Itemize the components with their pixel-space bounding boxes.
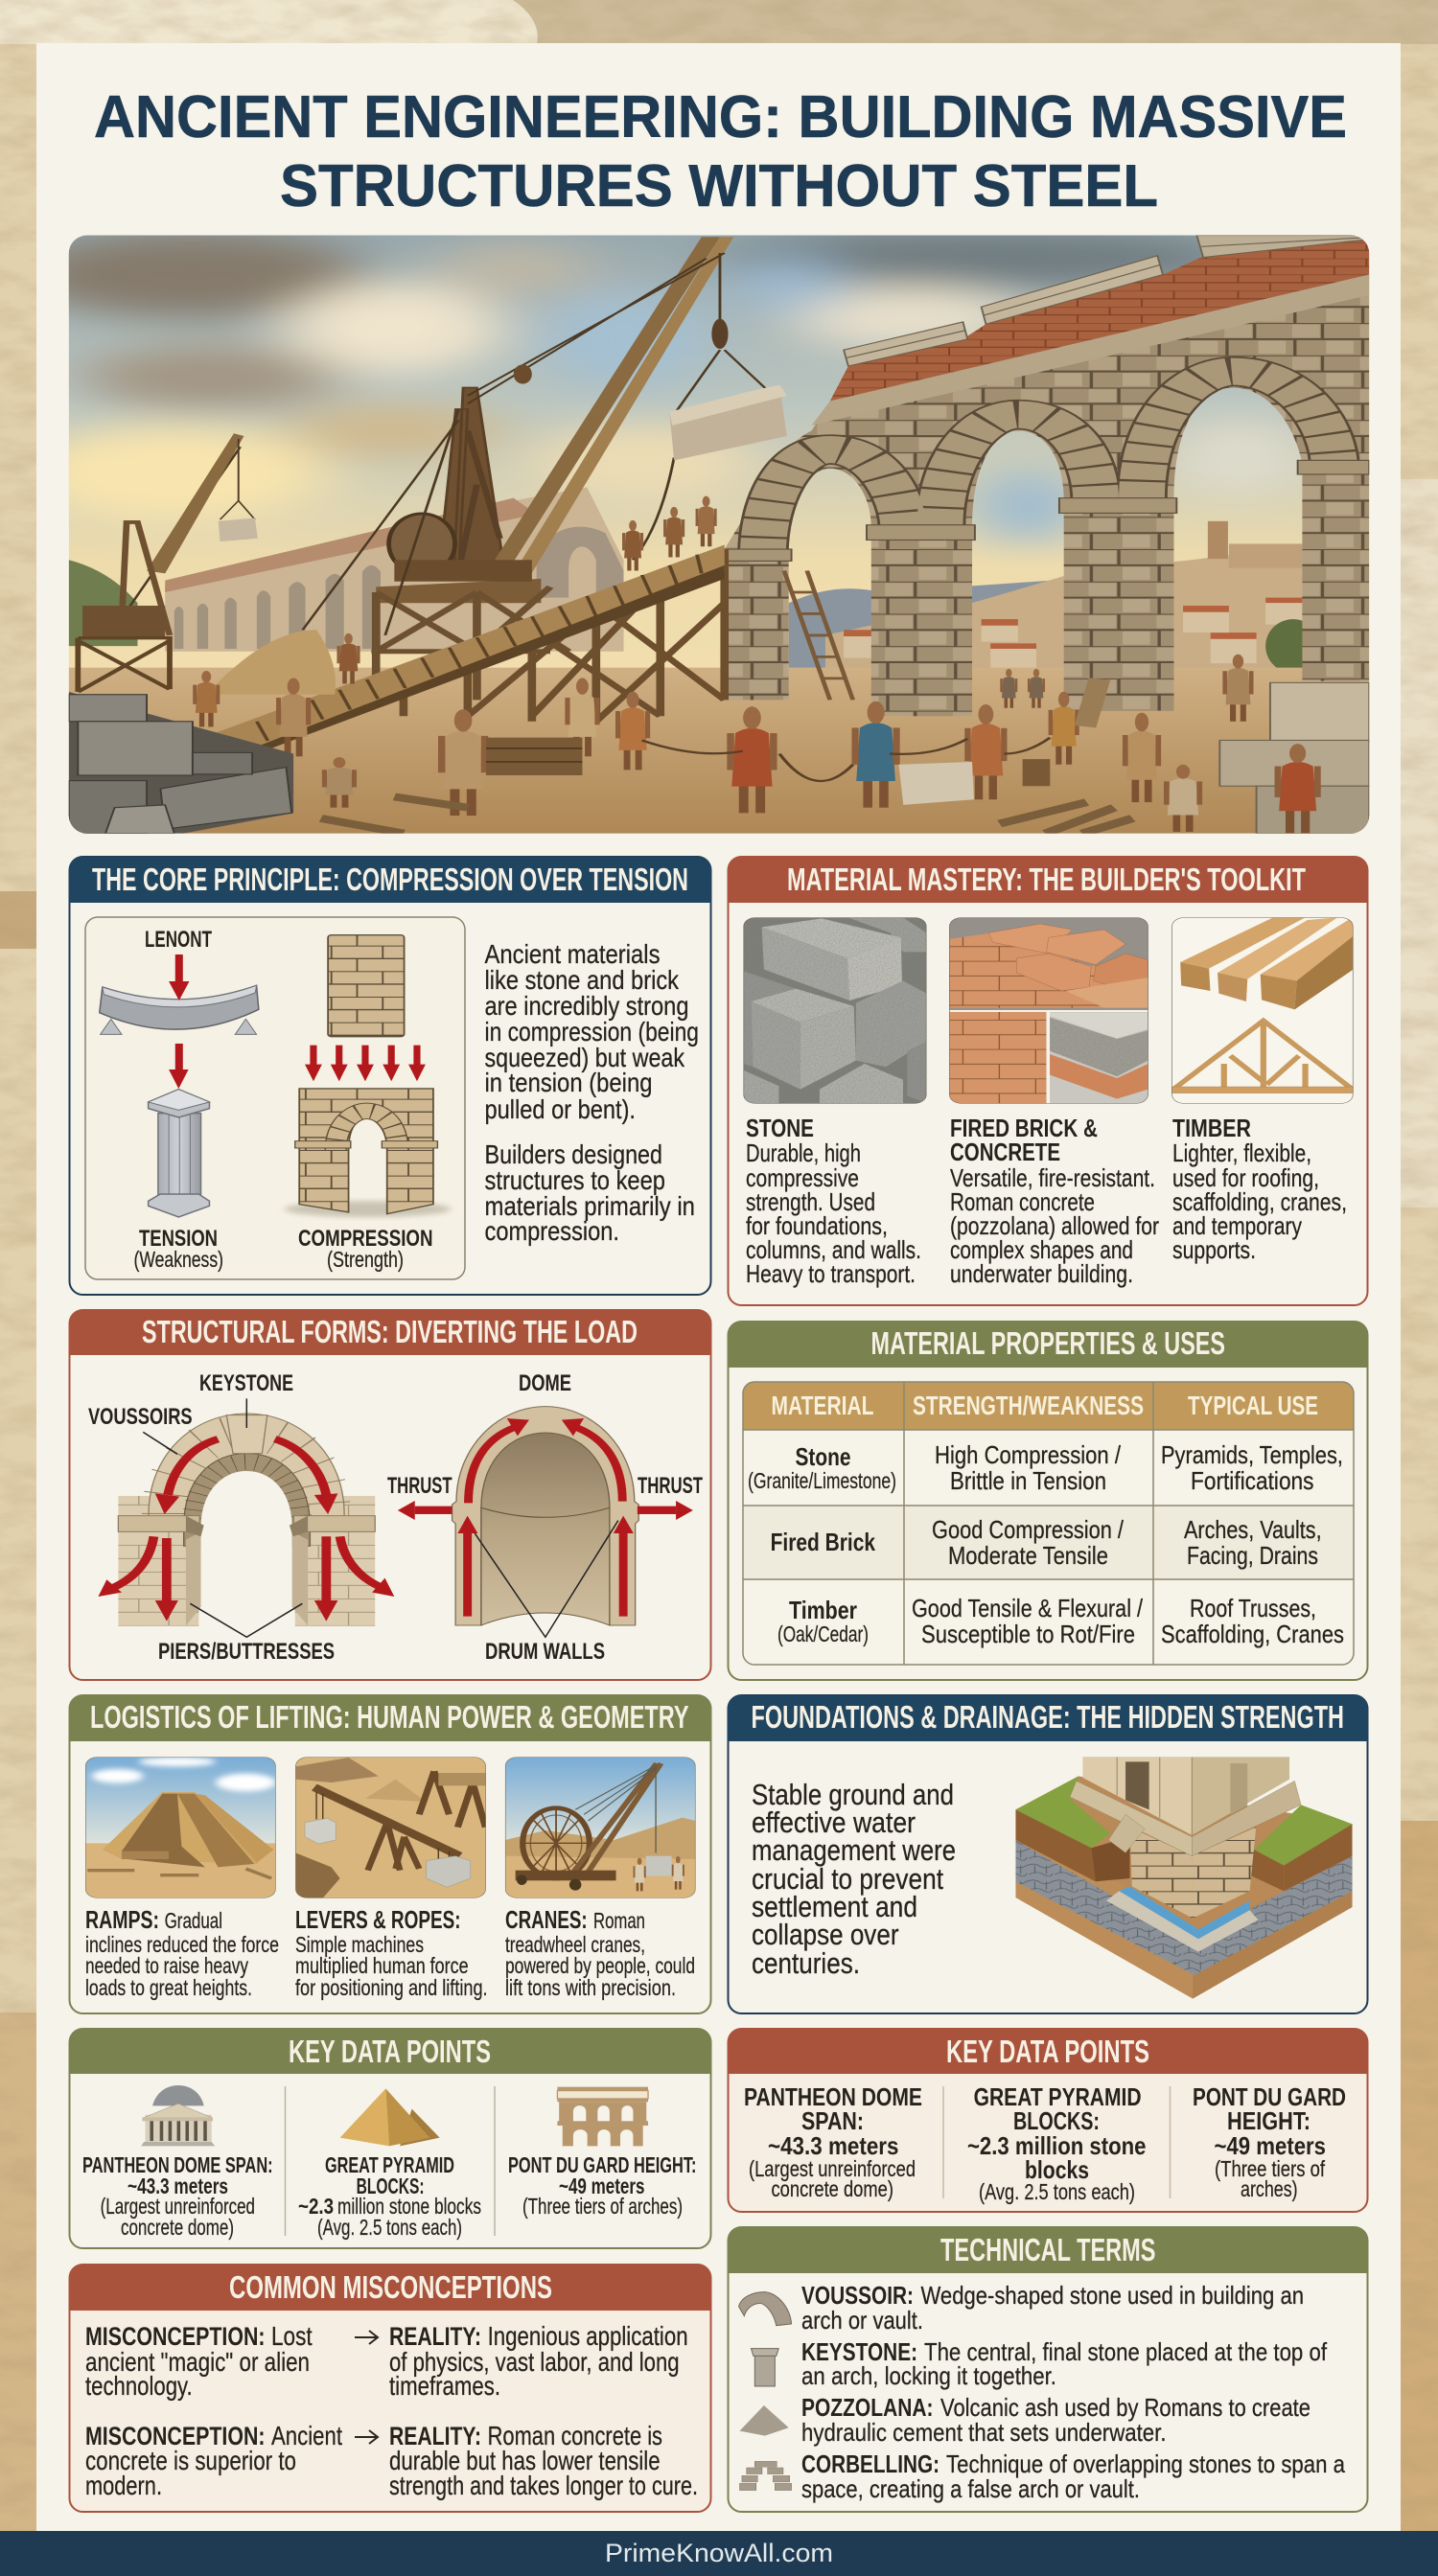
misconception two: Ancient <box>271 2421 342 2450</box>
stat: great pyramid blocks: ~2.3 <box>298 2194 334 2219</box>
labels: structural forms: DOME <box>519 1370 571 1396</box>
stat: pont du gard height: PONT DU GARD <box>1193 2082 1346 2111</box>
icon: pont du gard <box>557 2087 648 2146</box>
term: keystone: an arch, locking it together. <box>801 2361 1056 2390</box>
image: ramps <box>85 1757 276 1898</box>
misconception two: modern. <box>85 2471 162 2500</box>
icon: pantheon <box>141 2085 215 2146</box>
leader lines: arch <box>143 1398 302 1637</box>
text block: core principle explanation: Builders designed <box>485 1139 662 1169</box>
stat: great pyramid blocks: GREAT PYRAMID <box>974 2082 1142 2111</box>
misconception two <box>85 2421 342 2500</box>
icon: brick tower <box>328 935 405 1037</box>
table row: fired brick: Good Compression / <box>932 1515 1125 1544</box>
term: keystone: The central, final stone placed at the top of <box>924 2337 1328 2366</box>
text block: core principle explanation: like stone and brick <box>485 965 680 995</box>
misconception two: concrete is superior to <box>85 2446 296 2475</box>
stat: pont du gard height: arches) <box>1241 2176 1298 2201</box>
arrow: load on column <box>169 1044 189 1089</box>
text: levers and ropes: Simple machines <box>295 1932 424 1957</box>
reality two: strength and takes longer to cure. <box>389 2471 698 2500</box>
diagram: arch <box>98 1414 394 1626</box>
text: cranes: Roman <box>593 1908 645 1933</box>
image: levers and ropes <box>295 1757 486 1898</box>
ground <box>69 668 1369 835</box>
sand heap <box>206 630 336 695</box>
table row: timber <box>777 1594 1344 1648</box>
column: timber: TIMBER <box>1172 1114 1251 1142</box>
column: stone <box>746 1114 921 1288</box>
column: timber: and temporary <box>1172 1211 1302 1240</box>
illustration: foundation cross-section <box>1015 1757 1353 1999</box>
footer bar: PrimeKnowAll.com <box>605 2539 833 2567</box>
panel: key data points with icons <box>69 2029 711 2248</box>
table row: stone: Stone <box>796 1442 851 1471</box>
table row: timber: Roof Trusses, <box>1190 1594 1316 1622</box>
hero illustration: Roman aqueduct construction <box>18 229 1369 835</box>
term: keystone <box>801 2337 1328 2390</box>
reality one <box>389 2321 688 2401</box>
term: corbelling <box>801 2450 1345 2503</box>
text: levers and ropes <box>295 1905 488 2000</box>
ramp <box>200 545 725 754</box>
red load arrows: arch <box>98 1439 394 1622</box>
loose block, crate, timber <box>321 678 1132 834</box>
reality one: REALITY: <box>389 2322 481 2351</box>
text: ramps <box>85 1905 279 2000</box>
text: foundations explanation: crucial to prevent <box>752 1862 943 1896</box>
misconception one: MISCONCEPTION: <box>85 2322 265 2351</box>
column: timber <box>1172 1114 1347 1264</box>
labels: structural forms: KEYSTONE <box>199 1370 293 1396</box>
column: fired brick and concrete: complex shapes and <box>950 1235 1133 1264</box>
column: fired brick and concrete: underwater building. <box>950 1259 1133 1288</box>
image: stone blocks <box>743 917 927 1104</box>
leader lines: dome <box>475 1521 618 1637</box>
image: brick and concrete <box>949 917 1148 1104</box>
stat: pont du gard height: (Three tiers of <box>1215 2156 1325 2181</box>
ladder <box>784 571 853 700</box>
icon: pozzolana pile <box>740 2405 789 2436</box>
stat: pantheon dome span <box>744 2082 922 2201</box>
stat: pantheon dome span: SPAN: <box>801 2106 864 2135</box>
text block: core principle explanation <box>485 939 699 1246</box>
image: timber beams and truss <box>1171 917 1354 1104</box>
text block: core principle explanation: structures to keep <box>485 1165 665 1195</box>
label: lenont: LENONT <box>145 927 212 953</box>
stat: pantheon dome span: PANTHEON DOME SPAN: <box>82 2152 273 2177</box>
icon: column <box>149 1090 209 1217</box>
captions: tension and compression: COMPRESSION <box>298 1226 433 1252</box>
term: voussoir: Wedge-shaped stone used in building an <box>920 2281 1304 2310</box>
column: fired brick and concrete: Roman concrete <box>950 1187 1095 1216</box>
text block: core principle explanation: in tension (being <box>485 1068 652 1097</box>
table row: fired brick <box>771 1515 1322 1570</box>
column: stone: strength. Used <box>746 1187 875 1216</box>
workers <box>193 496 1254 832</box>
text: foundations explanation: collapse over <box>752 1918 899 1951</box>
table row: fired brick: Fired Brick <box>771 1528 875 1556</box>
header: logistics: LOGISTICS OF LIFTING: HUMAN POWER & GEOMETRY <box>90 1699 688 1735</box>
text block: core principle explanation: squeezed) but weak <box>485 1043 685 1072</box>
header: the core principle <box>69 857 711 903</box>
title: ANCIENT ENGINEERING: BUILDING MASSIVE <box>94 84 1347 150</box>
table: materials <box>743 1382 1354 1665</box>
header: material properties <box>728 1322 1368 1368</box>
text: ramps: loads to great heights. <box>85 1975 252 2000</box>
reality two: durable but has lower tensile <box>389 2446 661 2475</box>
labels: structural forms: THRUST <box>387 1473 452 1499</box>
foreground stones <box>69 692 293 834</box>
misconception one: ancient "magic" or alien <box>85 2347 310 2377</box>
table row: stone: Fortifications <box>1191 1466 1313 1495</box>
title <box>94 84 1347 219</box>
text block: core principle explanation: Ancient materials <box>485 939 660 969</box>
tower <box>1082 1757 1192 1835</box>
text: foundations explanation: settlement and <box>752 1890 917 1923</box>
image: treadwheel crane <box>505 1757 696 1898</box>
panel: common misconceptions <box>69 2265 711 2512</box>
stat: pantheon dome span: PANTHEON DOME <box>744 2082 922 2111</box>
town <box>825 521 1302 668</box>
arrow: misconception to reality <box>355 2331 378 2344</box>
stat: great pyramid blocks: (Avg. 2.5 tons each) <box>979 2179 1135 2204</box>
stat: great pyramid blocks: blocks <box>1025 2155 1089 2184</box>
table header row: STRENGTH/WEAKNESS <box>913 1391 1144 1420</box>
stat: great pyramid blocks: (Avg. 2.5 tons each) <box>317 2215 462 2240</box>
icon: stone arch <box>285 1089 452 1217</box>
stat: great pyramid blocks: ~2.3 million stone <box>967 2131 1147 2160</box>
text: ramps: needed to raise heavy <box>85 1953 248 1978</box>
stat: pantheon dome span: (Largest unreinforced <box>749 2156 916 2181</box>
stat: pantheon dome span: (Largest unreinforced <box>101 2194 255 2219</box>
text block: core principle explanation: are incredibly strong <box>485 991 688 1021</box>
header: technical terms <box>728 2227 1368 2273</box>
diagram: dome <box>398 1407 693 1625</box>
labels: structural forms: DRUM WALLS <box>485 1639 605 1665</box>
term: pozzolana: POZZOLANA: <box>801 2393 934 2422</box>
header: misconceptions <box>69 2265 711 2311</box>
panel: foundations and drainage <box>728 1695 1368 2013</box>
table row: stone: (Granite/Limestone) <box>748 1468 896 1493</box>
stepped foundation <box>1130 1828 1193 1919</box>
text: foundations explanation: Stable ground and <box>752 1778 954 1811</box>
table row: timber: Good Tensile & Flexural / <box>912 1594 1144 1622</box>
term: pozzolana: hydraulic cement that sets underwater. <box>801 2418 1166 2447</box>
table row: timber: (Oak/Cedar) <box>777 1622 869 1646</box>
text: foundations explanation: centuries. <box>752 1946 860 1980</box>
text: cranes <box>505 1905 695 2000</box>
column: stone: STONE <box>746 1114 814 1142</box>
column: stone: Heavy to transport. <box>746 1259 916 1288</box>
term: corbelling: space, creating a false arch or vault. <box>801 2474 1140 2503</box>
icon: keystone column <box>751 2349 778 2386</box>
misconception two: MISCONCEPTION: <box>85 2422 265 2450</box>
stat: pont du gard height: ~49 meters <box>559 2174 644 2198</box>
table row: fired brick: Facing, Drains <box>1187 1541 1318 1570</box>
reality one: Ingenious application <box>488 2321 688 2351</box>
stat: pantheon dome span: concrete dome) <box>121 2215 234 2240</box>
stat: pont du gard height <box>508 2152 696 2219</box>
text: ramps: inclines reduced the force <box>85 1932 279 1957</box>
stat: pantheon dome span <box>82 2152 273 2240</box>
column: fired brick and concrete: Versatile, fire-resistant. <box>950 1163 1155 1192</box>
header: material properties: MATERIAL PROPERTIES & USES <box>870 1325 1225 1361</box>
stat: great pyramid blocks <box>298 2152 481 2240</box>
text block: core principle explanation: materials primarily in <box>485 1191 695 1221</box>
term: pozzolana <box>801 2393 1310 2447</box>
stat: pantheon dome span: ~43.3 meters <box>768 2131 899 2160</box>
title: STRUCTURES WITHOUT STEEL <box>280 153 1158 219</box>
reality one: timeframes. <box>389 2371 500 2401</box>
text: ramps: Gradual <box>165 1908 222 1933</box>
panel: structural forms <box>69 1310 711 1680</box>
term: voussoir: arch or vault. <box>801 2306 923 2334</box>
term: pozzolana: Volcanic ash used by Romans to create <box>940 2393 1310 2422</box>
column: stone: columns, and walls. <box>746 1235 921 1264</box>
stone trench and water channel <box>1119 1886 1250 1939</box>
header: the core principle: THE CORE PRINCIPLE: COMPRESSION OVER TENSION <box>92 862 688 897</box>
column: stone: compressive <box>746 1163 859 1192</box>
text: cranes: powered by people, could <box>505 1953 695 1978</box>
term: corbelling: Technique of overlapping stones to span a <box>946 2450 1345 2478</box>
text: levers and ropes: for positioning and lifting. <box>295 1975 488 2000</box>
column: stone: for foundations, <box>746 1211 888 1240</box>
captions: tension and compression: (Strength) <box>327 1247 404 1272</box>
icon: pyramid <box>340 2088 440 2146</box>
stat: great pyramid blocks: BLOCKS: <box>357 2174 425 2198</box>
stat: pont du gard height <box>1193 2082 1346 2201</box>
captions: tension and compression <box>134 1226 433 1272</box>
text block: core principle explanation: compression. <box>485 1216 619 1246</box>
arrow: misconception to reality <box>355 2430 378 2444</box>
table row: stone: Brittle in Tension <box>950 1466 1106 1495</box>
stat: pont du gard height: ~49 meters <box>1214 2131 1326 2160</box>
reality two: Roman concrete is <box>488 2421 662 2450</box>
text: levers and ropes: multiplied human force <box>295 1953 469 1978</box>
header: logistics <box>69 1695 711 1741</box>
header: key data points <box>728 2029 1368 2074</box>
text: foundations explanation: effective water <box>752 1806 916 1839</box>
table row: timber: Scaffolding, Cranes <box>1161 1620 1344 1648</box>
column: timber: used for roofing, <box>1172 1163 1319 1192</box>
small crane <box>78 433 258 692</box>
term: corbelling: CORBELLING: <box>801 2450 939 2478</box>
table row: timber: Timber <box>789 1596 857 1624</box>
panel: technical terms <box>728 2227 1368 2512</box>
icon: voussoir <box>739 2292 792 2326</box>
reality two <box>389 2421 698 2500</box>
table row: stone <box>748 1440 1343 1495</box>
header: key data points: KEY DATA POINTS <box>946 2034 1149 2069</box>
reality two: REALITY: <box>389 2422 481 2450</box>
stat: great pyramid blocks: million stone blocks <box>337 2194 481 2219</box>
column: timber: supports. <box>1172 1235 1256 1264</box>
header: technical terms: TECHNICAL TERMS <box>940 2232 1156 2267</box>
icon: corbelling <box>740 2461 792 2491</box>
header: misconceptions: COMMON MISCONCEPTIONS <box>229 2269 552 2305</box>
table header row <box>771 1391 1318 1420</box>
labels: structural forms: VOUSSOIRS <box>88 1404 193 1430</box>
panel: material properties and uses <box>728 1322 1368 1680</box>
panel: key data points text <box>728 2029 1368 2212</box>
stat: pont du gard height: PONT DU GARD HEIGHT: <box>508 2152 696 2177</box>
text: cranes: lift tons with precision. <box>505 1975 676 2000</box>
big crane <box>128 237 787 700</box>
text: cranes: CRANES: <box>505 1905 588 1934</box>
column: timber: scaffolding, cranes, <box>1172 1187 1347 1216</box>
text block: core principle explanation: in compression (being <box>485 1017 699 1046</box>
column: fired brick and concrete <box>950 1114 1159 1288</box>
diagram box: tension vs compression <box>85 917 465 1279</box>
misconception one: Lost <box>271 2321 313 2351</box>
column: fired brick and concrete: FIRED BRICK & <box>950 1114 1098 1142</box>
table row: fired brick: Arches, Vaults, <box>1184 1515 1322 1544</box>
captions: tension and compression: TENSION <box>139 1226 218 1252</box>
stat: pantheon dome span: ~43.3 meters <box>128 2174 228 2198</box>
text: ramps: RAMPS: <box>85 1905 159 1934</box>
stat: pantheon dome span: concrete dome) <box>771 2176 893 2201</box>
header: key data points: KEY DATA POINTS <box>289 2034 491 2069</box>
text: foundations explanation <box>752 1778 956 1980</box>
table row: fired brick: Moderate Tensile <box>948 1541 1108 1570</box>
icon: bent beam under load <box>100 954 259 1034</box>
table header row: MATERIAL <box>771 1391 874 1420</box>
ground block <box>1015 1776 1353 1999</box>
reality one: of physics, vast labor, and long <box>389 2347 680 2377</box>
distant hills <box>69 560 137 646</box>
text: levers and ropes: LEVERS & ROPES: <box>295 1905 460 1934</box>
panel: the core principle <box>69 857 711 1295</box>
footer bar <box>0 2531 1438 2576</box>
text block: core principle explanation: pulled or bent). <box>485 1094 636 1124</box>
header: key data points <box>69 2029 711 2074</box>
term: keystone: KEYSTONE: <box>801 2337 917 2366</box>
table row: stone: High Compression / <box>935 1440 1122 1469</box>
distant aqueduct <box>165 487 624 652</box>
header: material mastery <box>728 857 1368 903</box>
red load arrows: dome <box>398 1418 693 1617</box>
labels: structural forms: PIERS/BUTTRESSES <box>158 1639 335 1665</box>
stat: pont du gard height: HEIGHT: <box>1227 2106 1310 2135</box>
panel: material mastery <box>728 857 1368 1305</box>
text: cranes: treadwheel cranes, <box>505 1932 645 1957</box>
term: voussoir <box>801 2281 1304 2334</box>
column: timber: Lighter, flexible, <box>1172 1138 1311 1167</box>
misconception one: technology. <box>85 2371 193 2401</box>
arrows: compression load <box>305 1046 426 1081</box>
panel: logistics of lifting <box>69 1695 711 2013</box>
header: foundations <box>728 1695 1368 1741</box>
text: foundations explanation: management were <box>752 1833 956 1867</box>
captions: tension and compression: (Weakness) <box>134 1247 223 1272</box>
column: fired brick and concrete: (pozzolana) allowed for <box>950 1211 1159 1240</box>
header: structural forms <box>69 1310 711 1355</box>
stat: pont du gard height: (Three tiers of arches) <box>522 2194 683 2219</box>
labels: structural forms: THRUST <box>638 1473 703 1499</box>
stat: great pyramid blocks: GREAT PYRAMID <box>325 2152 454 2177</box>
stat: great pyramid blocks <box>967 2082 1147 2204</box>
column: stone: Durable, high <box>746 1138 861 1167</box>
table header row: TYPICAL USE <box>1188 1391 1318 1420</box>
labels: structural forms <box>88 1370 703 1665</box>
column: fired brick and concrete: CONCRETE <box>950 1138 1060 1166</box>
table row: stone: Pyramids, Temples, <box>1161 1440 1343 1469</box>
table row: timber: Susceptible to Rot/Fire <box>921 1620 1135 1648</box>
big aqueduct <box>725 275 1369 716</box>
term: voussoir: VOUSSOIR: <box>801 2281 914 2310</box>
misconception one <box>85 2321 313 2401</box>
header: structural forms: STRUCTURAL FORMS: DIVERTING THE LOAD <box>142 1314 638 1349</box>
stat: great pyramid blocks: BLOCKS: <box>1013 2106 1100 2135</box>
